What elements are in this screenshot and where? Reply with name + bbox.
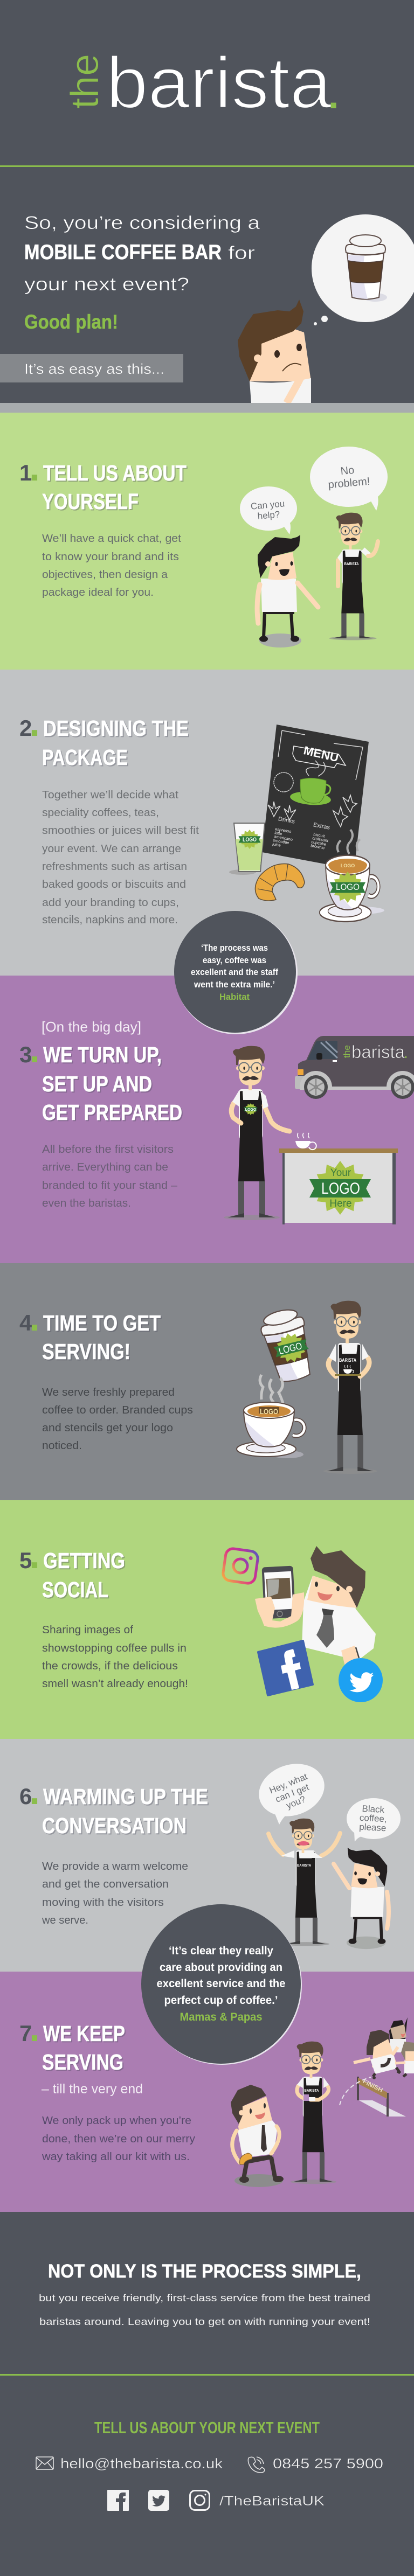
branded van: the (342, 1045, 352, 1058)
step 7 heading: . (29, 2007, 40, 2050)
till the very end label: – till the very end (42, 2081, 143, 2097)
step 4 heading (19, 1296, 161, 1364)
step 7 heading (19, 2007, 125, 2074)
juice glass with logo: LOGO (243, 837, 257, 843)
step 4 body text: We serve freshly prepared (42, 1386, 175, 1398)
speech bubble: no problem: No (340, 464, 355, 477)
step 2 body text: speciality coffees, teas, (42, 806, 159, 819)
step 4 body text (42, 1386, 193, 1452)
intro heading: So, you’re considering a (24, 213, 260, 233)
step 1 heading: . (29, 446, 40, 489)
good plan text: Good plan! (24, 311, 118, 333)
step 1 body text: package ideal for you. (42, 586, 154, 598)
step 4 heading: 4 (19, 1310, 32, 1335)
step 5 body text: Sharing images of (42, 1624, 133, 1636)
step 7 body text: done, then we’re on our merry (42, 2133, 196, 2145)
chalkboard menu (262, 725, 369, 869)
callout: habitat testimonial: easy, coffee was (203, 956, 266, 965)
icon: email (36, 2457, 53, 2469)
step 3 heading: SET UP AND (42, 1071, 152, 1096)
chalkboard menu: espresso (275, 826, 292, 834)
closing heading: NOT ONLY IS THE PROCESS SIMPLE, (48, 2261, 361, 2282)
step 4 heading: . (29, 1296, 40, 1339)
logo: the (63, 54, 107, 109)
step 7 body text (42, 2114, 196, 2163)
thinking man (238, 300, 311, 403)
branded coffee cup: LOGO (336, 882, 360, 892)
barista character welcoming: BARISTA (297, 1864, 311, 1868)
logo: . (328, 74, 339, 116)
step 3 body text: even the baristas. (42, 1197, 131, 1209)
step 3 body text: branded to fit your stand – (42, 1179, 178, 1192)
panel: step 6 warming up the conversation (0, 1739, 414, 1972)
icon: phone (248, 2457, 265, 2473)
step 3 heading (19, 1028, 182, 1125)
chalkboard menu: latte (274, 830, 282, 836)
step 2 body text: Together we’ll decide what (42, 789, 178, 801)
callout: habitat testimonial (174, 911, 298, 1034)
step 7 body text: We only pack up when you’re (42, 2114, 191, 2127)
speech bubble: no problem: problem! (328, 476, 370, 491)
step 6 heading: . (29, 1770, 40, 1813)
step 6 heading: WARMING UP THE (43, 1784, 208, 1809)
closing text: baristas around. Leaving you to get on with running your event! (39, 2316, 370, 2327)
branded coffee cup (320, 830, 384, 922)
step 1 heading (19, 446, 187, 514)
step 5 body text: smell wasn’t already enough! (42, 1677, 188, 1690)
step 1 heading: TELL US ABOUT (43, 461, 187, 485)
barista character with tray: BARISTA (339, 1357, 356, 1363)
speech bubble: can you help: Can you (250, 498, 285, 512)
branded stand (279, 1133, 398, 1224)
step 4 heading: TIME TO GET (43, 1311, 161, 1335)
speech bubble: can you help (240, 486, 297, 534)
panel: step 1 tell us about yourself (0, 413, 414, 670)
barista character at stand: LOGO (245, 1108, 257, 1112)
step 2 body text: stencils, napkins and more. (42, 914, 178, 926)
call to action heading: TELL US ABOUT YOUR NEXT EVENT (94, 2418, 320, 2437)
barista character: BARISTA (344, 562, 359, 566)
callout: mamas and papas testimonial: Mamas & Papas (180, 2011, 262, 2023)
step 6 body text: moving with the visitors (42, 1896, 164, 1909)
branded takeaway cup (258, 1306, 318, 1385)
callout: habitat testimonial: excellent and the staff (191, 967, 278, 977)
step 5 heading: . (29, 1534, 40, 1577)
branded van (295, 1036, 414, 1103)
chalkboard menu: cupcake (311, 839, 327, 847)
panel: closing and contact (0, 2212, 414, 2576)
speech bubble: hey what can i get you: you? (285, 1794, 307, 1811)
step 2 heading: 2 (19, 715, 32, 741)
branded coffee cup: LOGO (341, 863, 355, 868)
running figures (354, 2017, 414, 2079)
step 3 body text (42, 1143, 178, 1209)
step 1 heading: YOURSELF (42, 489, 139, 514)
step 6 body text: and get the conversation (42, 1878, 169, 1890)
step 7 heading: SERVING (42, 2050, 123, 2074)
panel: step 7 we keep serving (0, 1972, 414, 2212)
callout: mamas and papas testimonial (141, 1904, 302, 2065)
speech bubble: black coffee please: Black (362, 1804, 385, 1815)
branded stand: Here (329, 1198, 352, 1209)
step 6 heading (19, 1770, 208, 1838)
step 2 heading: . (29, 701, 40, 744)
logo: barista (106, 42, 332, 123)
branded takeaway cup: LOGO (278, 1340, 303, 1356)
chalkboard menu: americano (274, 834, 293, 842)
panel: header (0, 0, 414, 414)
callout: habitat testimonial: Habitat (219, 992, 250, 1002)
step 2 body text: your event. We can arrange (42, 843, 181, 855)
step 5 body text: showstopping coffee pulls in (42, 1642, 187, 1654)
step 6 body text (42, 1860, 188, 1926)
speech bubble: can you help: help? (257, 509, 280, 521)
icon: twitter square (148, 2490, 169, 2511)
branded stand: Your (330, 1167, 351, 1179)
step 7 heading: 7 (19, 2021, 32, 2046)
step 1 body text: objectives, then design a (42, 568, 168, 581)
panel: step 4 time to get serving (0, 1263, 414, 1500)
step 3 heading: GET PREPARED (42, 1100, 182, 1125)
step 3 body text: All before the first visitors (42, 1143, 174, 1155)
callout: mamas and papas testimonial: care about providing an (160, 1961, 282, 1974)
chalkboard menu: biscuit (313, 832, 326, 839)
barista character welcoming (268, 1819, 340, 1946)
man with croissant (231, 2085, 284, 2187)
juice glass with logo (229, 823, 265, 875)
chalkboard menu: croissant (312, 836, 329, 843)
finish hurdle: FINISH (362, 2078, 384, 2094)
email address: hello@thebarista.co.uk (60, 2455, 223, 2471)
icon: facebook (258, 1641, 313, 1695)
callout: habitat testimonial: ‘The process was (201, 943, 268, 953)
step 2 body text: baked goods or biscuits and (42, 878, 186, 890)
speech bubble: black coffee please: please (359, 1822, 387, 1833)
step 6 body text: we serve. (42, 1914, 88, 1926)
intro heading (24, 213, 260, 295)
step 2 body text: add your branding to cups, (42, 896, 179, 909)
step 2 heading: DESIGNING THE (43, 716, 189, 741)
step 5 heading (19, 1534, 125, 1602)
step 4 heading: SERVING! (42, 1339, 130, 1364)
callout: mamas and papas testimonial: perfect cup of coffee.’ (164, 1994, 278, 2007)
man with phone (255, 1546, 376, 1666)
speech bubble: hey what can i get you (252, 1756, 331, 1825)
icon: instagram outline (190, 2491, 209, 2510)
step 5 heading: 5 (19, 1548, 32, 1573)
closing text (39, 2292, 370, 2327)
step 2 body text: smoothies or juices will best fit (42, 824, 199, 837)
step 2 body text: refreshments such as artisan (42, 860, 187, 873)
chalkboard menu: brownie (310, 843, 325, 851)
step 1 body text: to know your brand and its (42, 551, 179, 563)
croissant (255, 864, 305, 901)
chalkboard menu: smoothie (273, 838, 289, 845)
callout: mamas and papas testimonial: excellent service and the (156, 1978, 286, 1990)
easy banner: It’s as easy as this... (24, 361, 164, 377)
intro heading: MOBILE COFFEE BAR (24, 241, 222, 264)
step 2 heading (19, 701, 189, 770)
customer character (257, 535, 318, 648)
icon: twitter circle (339, 1658, 383, 1702)
speech bubble: no problem (310, 447, 388, 511)
branded van: . (404, 1049, 408, 1061)
speech bubble: black coffee please (347, 1798, 401, 1842)
step 2 heading: PACKAGE (42, 745, 128, 770)
speech bubble: hey what can i get you: can I get (274, 1782, 310, 1805)
step 5 heading: SOCIAL (42, 1577, 108, 1602)
chalkboard menu: MENU (302, 743, 340, 764)
easy banner (0, 354, 183, 382)
step 3 heading: 3 (19, 1042, 32, 1067)
step 3 heading: . (29, 1028, 40, 1071)
step 6 body text: We provide a warm welcome (42, 1860, 188, 1872)
step 1 body text: We’ll have a quick chat, get (42, 532, 181, 545)
intro heading: for (228, 243, 255, 263)
chalkboard menu: Drinks (278, 816, 295, 825)
step 1 body text (42, 532, 181, 598)
step 2 body text (42, 789, 199, 926)
step 7 heading: WE KEEP (43, 2021, 125, 2046)
step 6 heading: 6 (19, 1784, 32, 1809)
step 6 heading: CONVERSATION (42, 1813, 187, 1838)
chalkboard menu: juice (272, 841, 281, 848)
steaming coffee cup (237, 1375, 305, 1458)
barista character at stand (224, 1046, 290, 1220)
panel: step 5 getting social (0, 1500, 414, 1739)
chalkboard menu: Extras (313, 821, 330, 831)
thought bubble with coffee cup (312, 214, 414, 325)
icon: facebook square (107, 2490, 129, 2511)
step 4 body text: coffee to order. Branded cups (42, 1404, 193, 1416)
step 5 heading: GETTING (43, 1548, 125, 1573)
step 7 body text: way taking all our kit with us. (42, 2150, 190, 2163)
barista character with tray (323, 1301, 377, 1474)
panel: step 3 we turn up (0, 976, 414, 1263)
closing text: but you receive friendly, first-class service from the best trained (39, 2292, 370, 2303)
panel: step 2 designing the package (0, 670, 414, 976)
callout: mamas and papas testimonial: ‘It’s clear they really (169, 1945, 273, 1957)
step 4 body text: noticed. (42, 1439, 82, 1452)
speech bubble: black coffee please: coffee, (359, 1813, 387, 1824)
on the big day label: [On the big day] (42, 1019, 141, 1035)
barista character (329, 513, 378, 640)
speech bubble: hey what can i get you: Hey, what (268, 1771, 309, 1796)
step 3 heading: WE TURN UP, (43, 1042, 162, 1067)
callout: habitat testimonial: went the extra mile.’ (194, 980, 275, 990)
branded stand: LOGO (321, 1180, 360, 1198)
barista character taking order (291, 2042, 336, 2184)
step 3 body text: arrive. Everything can be (42, 1161, 168, 1173)
barista character taking order: BARISTA (304, 2089, 319, 2093)
step 5 body text: the crowds, if the delicious (42, 1660, 178, 1672)
step 4 body text: and stencils get your logo (42, 1422, 173, 1434)
intro heading: your next event? (24, 274, 189, 295)
social handle: /TheBaristaUK (219, 2494, 325, 2509)
customer character waving (334, 1848, 389, 1949)
finish hurdle (340, 2077, 406, 2117)
steaming coffee cup: LOGO (260, 1407, 278, 1416)
branded van: barista (351, 1042, 405, 1062)
phone number: 0845 257 5900 (273, 2455, 383, 2471)
icon: instagram (222, 1548, 259, 1584)
step 5 body text (42, 1624, 188, 1690)
step 1 heading: 1 (19, 460, 32, 485)
